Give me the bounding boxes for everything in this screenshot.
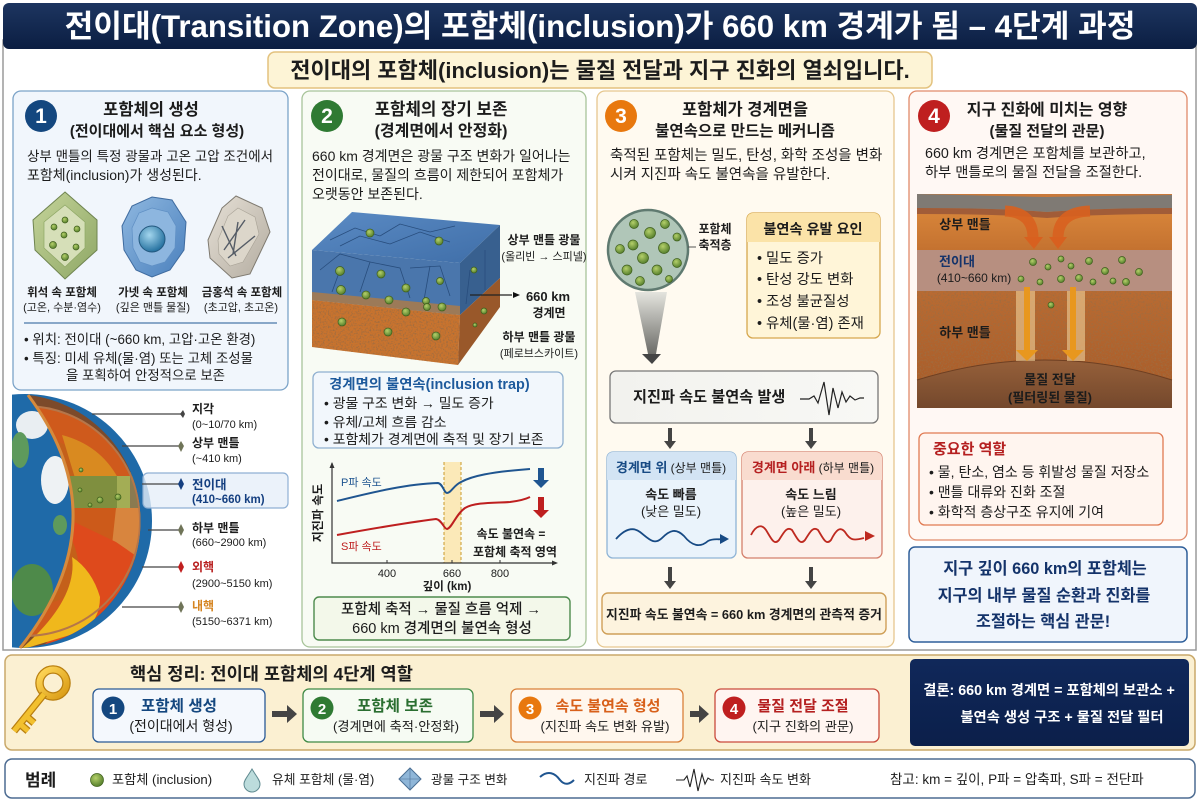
earth layer labels (192, 402, 272, 628)
callout: boundary summary: 660 km 경계면의 불연속 형성 (352, 620, 532, 637)
diagram: mantle cross-section: (필터링된 물질) (1008, 390, 1092, 405)
panel: 1 inclusion formation (13, 91, 288, 390)
earth layer labels: (660~2900 km) (192, 537, 266, 549)
description 2: 오랫동안 보존된다. (312, 186, 423, 202)
description 1: 포함체(inclusion)가 생성된다. (27, 167, 202, 183)
callout: observational evidence (602, 593, 886, 634)
step 4 (715, 689, 879, 742)
arrow (690, 705, 709, 723)
box: above boundary: (낮은 밀도) (641, 504, 701, 519)
heading 4 (967, 101, 1128, 140)
callout: inclusion trap: • 포함체가 경계면에 축적 및 장기 보존 (324, 431, 544, 447)
callout: discontinuity factors (747, 213, 880, 338)
panel: key takeaways (5, 655, 1195, 750)
arrows down (664, 428, 817, 449)
icon: stishovite gem (208, 196, 270, 278)
badge 2 (311, 100, 343, 132)
box: above boundary: 경계면 위 (상부 맨틀) (616, 460, 726, 475)
badge 4: 4 (928, 105, 940, 128)
cluster label (698, 221, 732, 252)
badge 4 (918, 100, 950, 132)
title bar: 전이대(Transition Zone)의 포함체(inclusion)가 660 km 경계가 됨 – 4단계 과정 (65, 9, 1135, 44)
step 4: 4 (730, 701, 739, 718)
description 3 (610, 147, 882, 183)
callout: important roles: • 맨틀 대류와 진화 조절 (929, 484, 1065, 500)
chart: seismic velocity vs depth: 속도 불연속 = (477, 527, 545, 541)
block labels: 경계면 (532, 306, 566, 320)
badge 2: 2 (321, 105, 333, 128)
callout: important roles (919, 433, 1163, 525)
heading 3: 불연속으로 만드는 메커니즘 (655, 122, 835, 140)
diagram: 660 km boundary block (312, 212, 520, 365)
block labels: 하부 맨틀 광물 (503, 330, 575, 344)
step 4: (지구 진화의 관문) (752, 719, 854, 734)
callout: discontinuity factors: • 유체(물·염) 존재 (757, 315, 864, 332)
description 1: 상부 맨틀의 특정 광물과 고온 고압 조건에서 (27, 149, 273, 164)
location and feature notes: • 위치: 전이대 (~660 km, 고압·고온 환경) (24, 332, 255, 347)
description 4 (925, 145, 1146, 181)
description 2 (312, 148, 571, 202)
callout: boundary summary: 포함체 축적 → 물질 흐름 억제 → (341, 601, 541, 618)
panel: 2 long-term preservation (302, 91, 587, 647)
icon: olivine gem (33, 192, 97, 279)
description 4: 660 km 경계면은 포함체를 보관하고, (925, 145, 1146, 162)
heading 4: (물질 전달의 관문) (990, 123, 1104, 140)
diagram: mantle cross-section: 하부 맨틀 (939, 325, 991, 340)
legend: fluid inclusion: 유체 포함체 (물·염) (272, 772, 374, 787)
step 1: 1 (109, 701, 117, 718)
box: above boundary: 속도 빠름 (645, 487, 697, 502)
heading 4: 지구 진화에 미치는 영향 (967, 101, 1128, 119)
step 1: (전이대에서 형성) (129, 718, 233, 734)
chart: seismic velocity vs depth: S파 속도 (341, 540, 382, 553)
chart: seismic velocity vs depth: 800 (491, 568, 509, 580)
callout: discontinuity factors: • 탄성 강도 변화 (757, 271, 853, 288)
callout: observational evidence: 지진파 속도 불연속 = 660 km 경계면의 관측적 증거 (606, 607, 882, 622)
title bar (3, 3, 1197, 49)
gem captions: 금홍석 속 포함체 (202, 285, 282, 299)
earth layer labels: (~410 km) (192, 453, 242, 465)
earth layer labels: 지각 (192, 402, 214, 416)
callout: inclusion trap: 경계면의 불연속(inclusion trap) (329, 376, 530, 393)
step 1: 포함체 생성 (141, 697, 217, 715)
heading 2: (경계면에서 안정화) (375, 122, 507, 140)
diagram: mantle cross-section: (410~660 km) (937, 271, 1011, 285)
arrows down to conclusion (664, 567, 817, 589)
callout: key gateway message: 조절하는 핵심 관문! (976, 612, 1110, 631)
arrow (480, 705, 504, 723)
callout: key gateway message (909, 547, 1187, 642)
heading 1: (전이대에서 핵심 요소 형성) (70, 123, 244, 140)
box: below boundary (742, 452, 882, 558)
conclusion box: 불연속 생성 구조 + 물질 전달 필터 (960, 709, 1164, 726)
badge 1 (25, 100, 57, 132)
legend: mineral structure change: 광물 구조 변화 (431, 773, 508, 787)
block labels: 660 km (526, 289, 570, 304)
cluster label: 축적층 (698, 238, 732, 252)
step 2: 포함체 보존 (357, 697, 433, 715)
box: seismic velocity discontinuity (610, 371, 878, 423)
cluster label: 포함체 (698, 221, 732, 236)
step 3: (지진파 속도 변화 유발) (541, 719, 669, 734)
gem captions: (초고압, 초고온) (204, 301, 278, 314)
box: below boundary: (높은 밀도) (781, 504, 841, 519)
badge 1: 1 (35, 105, 47, 128)
chart: seismic velocity vs depth: 포함체 축적 영역 (473, 544, 557, 559)
icon: inclusion cluster magnifier (608, 210, 696, 364)
description 1 (27, 149, 273, 183)
step 2 (303, 689, 473, 742)
legend: fluid inclusion (244, 769, 374, 792)
box: below boundary: 속도 느림 (785, 487, 837, 502)
block labels: 상부 맨틀 광물 (508, 233, 580, 247)
legend: seismic velocity change (676, 769, 811, 791)
heading 3: 포함체가 경계면을 (682, 100, 808, 119)
location and feature notes: • 특징: 미세 유체(물·염) 또는 고체 조성물 (24, 351, 253, 366)
legend: seismic velocity change: 지진파 속도 변화 (720, 772, 811, 787)
conclusion box: 결론: 660 km 경계면 = 포함체의 보관소 + (923, 682, 1175, 699)
gem captions: (깊은 맨틀 물질) (116, 301, 190, 314)
callout: inclusion trap (313, 372, 563, 448)
box: below boundary: 경계면 아래 (하부 맨틀) (752, 460, 874, 475)
chart: seismic velocity vs depth: 660 (443, 568, 461, 580)
block labels: (페로브스카이트) (500, 347, 578, 360)
chart: seismic velocity vs depth: 깊이 (km) (423, 580, 471, 593)
step 3 (511, 689, 683, 742)
earth layer labels: (0~10/70 km) (192, 419, 257, 431)
earth layer labels: (5150~6371 km) (192, 616, 272, 628)
callout: boundary summary (314, 597, 570, 640)
earth layer labels: (410~660 km) (192, 494, 265, 506)
leader lines (92, 410, 185, 613)
legend: seismic path: 지진파 경로 (584, 772, 647, 787)
earth layer labels: 전이대 (192, 478, 227, 492)
gem captions: 휘석 속 포함체 (27, 285, 97, 299)
description 4: 하부 맨틀로의 물질 전달을 조절한다. (925, 164, 1142, 181)
step 3: 3 (526, 701, 534, 718)
chart: seismic velocity vs depth: 지진파 속도 (311, 484, 325, 542)
diagram: mantle cross-section: 전이대 (939, 254, 975, 269)
heading: key takeaways: 핵심 정리: 전이대 포함체의 4단계 역할 (130, 664, 413, 684)
chart: earth cross-section (12, 394, 152, 649)
description 2: 660 km 경계면은 광물 구조 변화가 일어나는 (312, 148, 571, 164)
earth layer labels: (2900~5150 km) (192, 578, 272, 590)
diagram: mantle cross-section: 물질 전달 (1024, 372, 1076, 387)
location and feature notes (24, 332, 255, 383)
conclusion box (910, 659, 1189, 746)
icon: key (14, 670, 66, 731)
callout: discontinuity factors: 불연속 유발 요인 (763, 222, 863, 238)
legend: note: 참고: km = 깊이, P파 = 압축파, S파 = 전단파 (890, 772, 1144, 787)
callout: inclusion trap: • 광물 구조 변화 → 밀도 증가 (324, 395, 494, 411)
step 4: 물질 전달 조절 (757, 698, 849, 715)
badge 3: 3 (615, 105, 627, 128)
callout: discontinuity factors: • 조성 불균질성 (757, 293, 849, 310)
diagram: mantle cross-section (917, 194, 1172, 408)
legend (5, 759, 1195, 798)
callout: inclusion trap: • 유체/고체 흐름 감소 (324, 414, 447, 430)
legend: seismic path (540, 772, 647, 787)
heading 1: 포함체의 생성 (103, 100, 199, 119)
heading 1 (70, 100, 244, 140)
block labels: (올리빈 → 스피넬) (501, 250, 587, 263)
location and feature notes: 을 포획하여 안정적으로 보존 (66, 368, 225, 383)
arrow (272, 705, 297, 723)
description 3: 시켜 지진파 속도 불연속을 유발한다. (610, 166, 830, 183)
icon: garnet gem (122, 197, 186, 277)
heading 2: 포함체의 장기 보존 (375, 100, 507, 119)
chart: seismic velocity vs depth (311, 462, 558, 593)
step 1 (93, 689, 265, 742)
callout: key gateway message: 지구의 내부 물질 순환과 진화를 (938, 587, 1150, 605)
block labels (500, 233, 587, 360)
diagram: mantle cross-section: 상부 맨틀 (939, 217, 991, 232)
earth layer labels: 내핵 (192, 598, 214, 613)
gem captions: 가넷 속 포함체 (118, 285, 188, 299)
step 3: 속도 불연속 형성 (556, 698, 660, 715)
badge 3 (605, 100, 637, 132)
legend: inclusion: 포함체 (inclusion) (112, 772, 212, 787)
chart: seismic velocity vs depth: 400 (378, 568, 396, 580)
callout: important roles: • 화학적 층상구조 유지에 기여 (929, 504, 1104, 520)
legend: mineral structure change (399, 768, 508, 790)
step 2: (경계면에 축적·안정화) (333, 719, 459, 734)
box: above boundary (607, 452, 736, 558)
highlight: transition zone row (143, 473, 288, 508)
panel: 3 discontinuity mechanism (597, 91, 894, 647)
gem captions (23, 285, 282, 314)
page frame (3, 40, 1196, 650)
callout: important roles: • 물, 탄소, 염소 등 휘발성 물질 저장소 (929, 464, 1149, 480)
step 2: 2 (318, 701, 326, 718)
legend title: 범례 (25, 771, 56, 790)
earth layer labels: 하부 맨틀 (192, 521, 240, 535)
callout: discontinuity factors: • 밀도 증가 (757, 250, 823, 267)
subtitle banner (268, 52, 932, 88)
callout: important roles: 중요한 역할 (933, 441, 1006, 458)
description 3: 축적된 포함체는 밀도, 탄성, 화학 조성을 변화 (610, 147, 882, 164)
earth layer labels: 상부 맨틀 (192, 436, 240, 450)
subtitle banner: 전이대의 포함체(inclusion)는 물질 전달과 지구 진화의 열쇠입니다. (290, 58, 910, 83)
panel: 4 impact on earth evolution (909, 91, 1187, 540)
chart: seismic velocity vs depth: P파 속도 (341, 476, 382, 489)
heading 2 (375, 100, 507, 140)
box: seismic velocity discontinuity: 지진파 속도 불연속 발생 (633, 389, 785, 406)
gem captions: (고온, 수분·염수) (23, 301, 101, 314)
callout: key gateway message: 지구 깊이 660 km의 포함체는 (943, 560, 1147, 578)
earth layer labels: 외핵 (192, 559, 214, 574)
heading 3 (655, 100, 835, 140)
description 2: 전이대로, 물질의 흐름이 제한되어 포함체가 (312, 167, 563, 183)
